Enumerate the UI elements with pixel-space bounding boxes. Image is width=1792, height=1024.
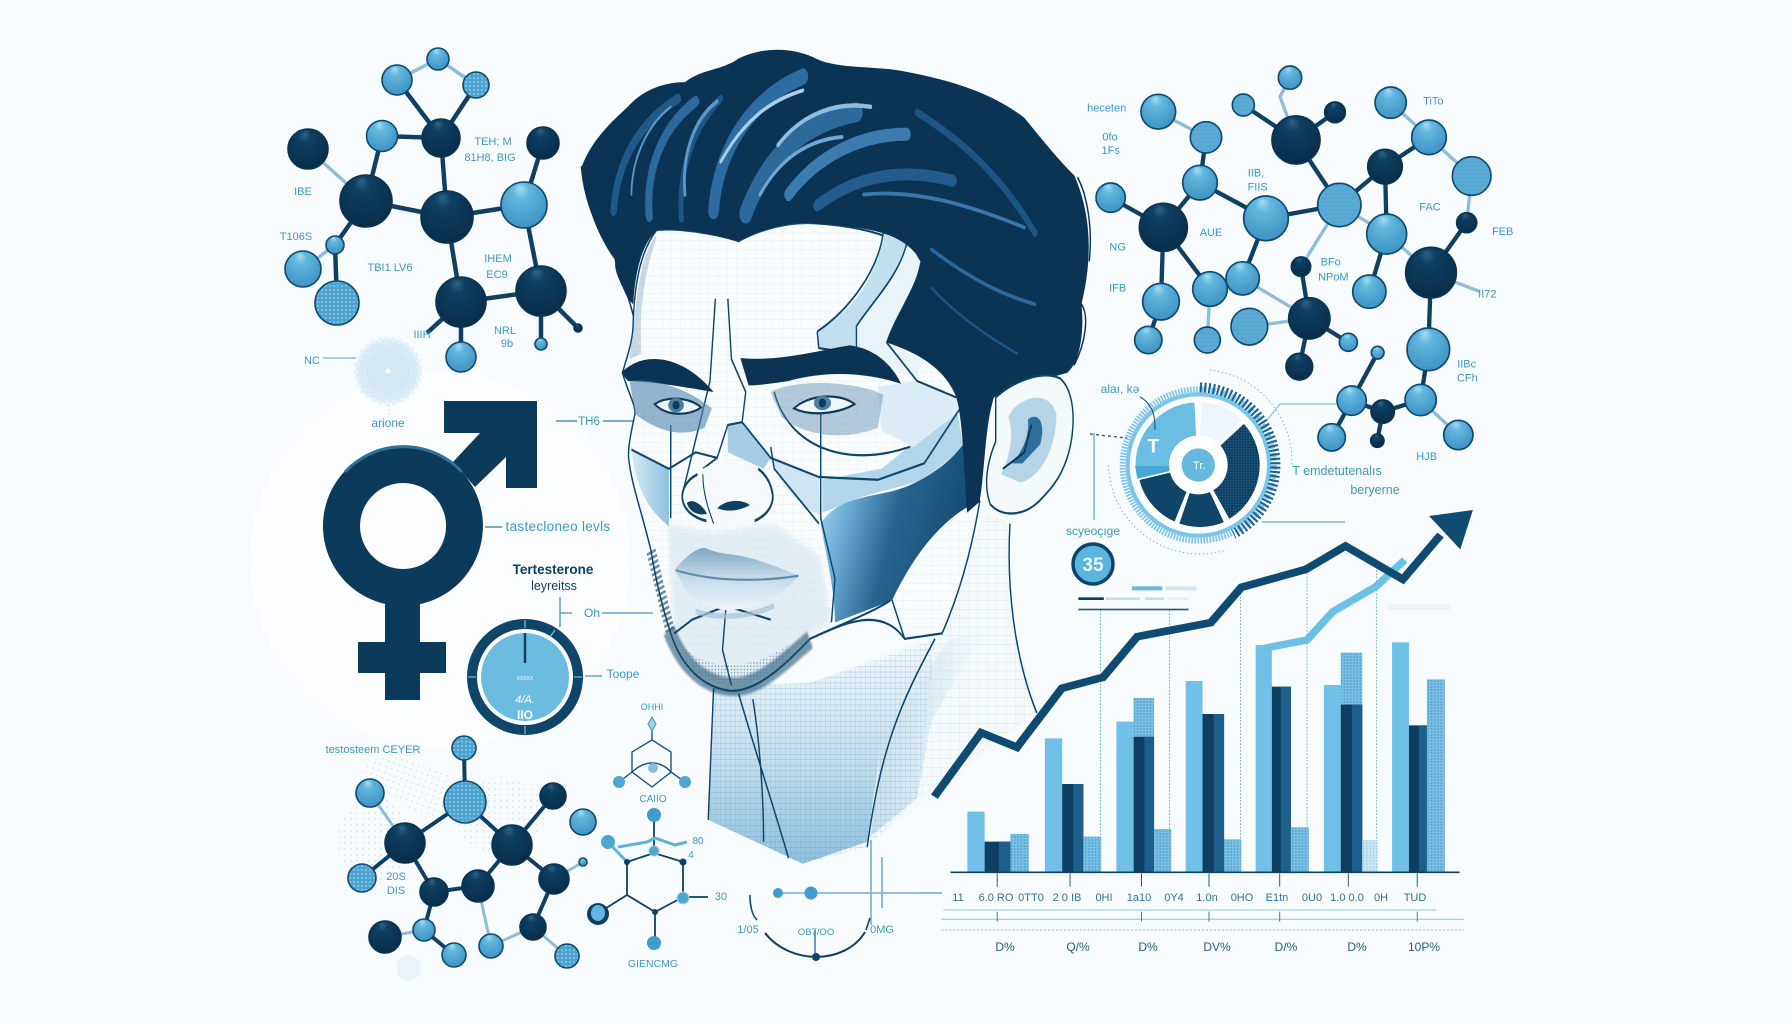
chart axis labels: 0U0 [1302,892,1322,904]
temple shading [630,236,656,359]
molecule labels: TiTo [1423,96,1444,108]
eyebrows [621,359,714,392]
molecule labels: NPoM [1318,272,1349,284]
chart axis labels: 11 [952,892,964,904]
molecule labels: FEB [1492,226,1513,238]
diagram: lower hexagon [587,808,727,970]
molecule labels: NRL [494,325,516,337]
diagram: small upper hexagon: CAIIO [639,794,667,805]
chart: radial pie dial: Tr. [1193,460,1206,472]
diagram: bottom arc gauge [737,840,942,961]
chart axis labels: 1.0n [1196,892,1218,904]
diagram: bottom arc gauge: 1/05 [737,924,759,936]
ear [987,375,1073,513]
diagram: lower hexagon: GIENCMG [628,958,678,970]
gauge: testosterone level dial: 4/A. [515,694,535,706]
hair [581,50,1089,513]
molecule labels: 1Fs [1102,145,1120,157]
chart axis labels: E1tn [1266,892,1288,904]
chart axis labels: D/% [1275,940,1298,954]
lower face stipple [667,524,831,677]
molecule labels: EC9 [486,269,508,281]
chart axis labels: D% [995,940,1015,954]
chart: radial pie dial [1108,370,1292,554]
chart axis labels: D% [1347,940,1367,954]
chart axis labels: 0TT0 [1018,892,1044,904]
face base [622,223,980,691]
icon: pale seal with label [304,339,420,430]
chart axis labels: 0Y4 [1164,892,1184,904]
molecule labels: CFh [1457,372,1478,384]
callout: gender symbol labels [485,416,640,534]
molecule: bottom left [326,736,596,981]
neck [708,513,1039,864]
molecule labels: DIS [387,885,405,897]
gauge: testosterone level dial [467,597,653,735]
icon: male gender symbol merged with cross [323,401,537,700]
molecule labels: FAC [1419,202,1441,214]
molecule labels: IIB, [1248,167,1264,179]
molecule labels: II72 [1478,288,1496,300]
illustration: male head with facial mesh [581,50,1090,864]
bars [967,642,1445,872]
eyes [630,381,712,433]
molecule labels: AUE [1200,227,1222,239]
chart axis labels: 1a10 [1127,892,1151,904]
chart: radial pie dial: T [1147,437,1159,458]
chart axis labels [952,892,1440,954]
callout: dial annotations: alaı, kə [1101,382,1140,396]
light trend line [1264,560,1405,648]
molecule labels: IBE [294,186,312,198]
molecule labels: TBI1 LV6 [367,262,413,274]
diagram: small upper hexagon [613,702,691,805]
callout: dial annotations [1066,382,1400,538]
chart axis labels: D% [1138,940,1158,954]
callout: dial annotations: scyeoçıge [1066,524,1120,538]
facial guide lines [631,233,960,685]
molecule labels: 0fo [1102,131,1118,143]
molecule labels: FIIS [1248,182,1268,194]
molecule labels: T106S [280,231,312,243]
molecule labels: 9b [501,338,513,350]
molecule labels: 20S [386,871,406,883]
molecule labels: IIBc [1457,358,1477,370]
chart axis labels: 10P% [1408,940,1440,954]
molecule labels [1087,96,1513,463]
callout: dial annotations: T emdetutenalıs [1292,464,1382,478]
nose [683,461,773,526]
badge: 35: 35 [1082,555,1104,576]
molecule labels: IHEM [484,253,512,265]
chart axis labels: DV% [1203,940,1231,954]
icon: pale seal with label: arione [371,416,405,430]
gauge: testosterone level dial: XXXXX [517,676,534,682]
callout: gender symbol labels: tastecloneo levls [506,519,610,534]
molecule labels: heceten [1087,103,1126,115]
molecule labels: TEH; M [474,136,512,148]
gauge: testosterone level dial: Toope [607,667,640,681]
diagram: lower hexagon: 4 [688,850,694,861]
chart axis labels: 6.0 RO [979,892,1014,904]
heading: testosterone levels: Tertesterone [513,562,594,577]
molecule labels: 81H8, BIG [464,152,516,164]
lips [674,548,799,610]
chart axis labels: 1.0 0.0 [1330,892,1364,904]
dark trend arrow [934,510,1473,797]
stubble shading [669,631,810,687]
gauge: testosterone level dial: IIO [517,708,533,722]
forehead panels [817,233,908,354]
chart axis labels: 2 0 IB [1053,892,1081,904]
cheek panels [631,450,669,526]
icon: pale seal with label: NC [304,355,320,367]
chart: grouped bars with trend lines [920,510,1473,930]
chart axis labels: Q/% [1066,940,1090,954]
diagram: lower hexagon: 30 [715,891,727,903]
callout: dial annotations: beryerne [1350,483,1400,497]
molecule labels [280,136,516,350]
chart axis labels: 0H [1374,892,1388,904]
molecule labels: NG [1109,242,1126,254]
molecule: top left [280,48,582,372]
molecule labels: IIIH [413,329,431,341]
gauge: testosterone level dial: Oh [584,606,600,620]
cheek muscle [821,436,978,622]
chart axis labels: 0HO [1231,892,1254,904]
dotted guides [1101,570,1377,872]
callout: gender symbol labels: TH6 [578,416,600,428]
molecule labels: HJB [1416,451,1437,463]
heading: testosterone levels [513,562,594,593]
diagram: bottom arc gauge: OB7/OO [798,927,834,938]
hair highlights [581,77,1090,365]
halo behind gender symbol [250,370,630,750]
diagram: small upper hexagon: OHHI [641,702,663,712]
chart axis labels: TUD [1404,892,1426,904]
molecule labels: testosteem CEYER [326,744,420,756]
heading: testosterone levels: leyreitss [531,579,577,593]
badge: 35 [1073,544,1113,584]
diagram: lower hexagon: 80 [692,836,704,847]
molecule: top right [1087,66,1513,463]
molecule labels [326,744,420,897]
axis [951,870,1460,875]
molecule labels: BFo [1321,257,1341,269]
molecule labels: IFB [1109,283,1126,295]
diagram: bottom arc gauge: 0MG [870,924,894,936]
legend bars [1078,586,1450,610]
table rules [920,893,1464,919]
chart axis labels: 0HI [1095,892,1113,904]
